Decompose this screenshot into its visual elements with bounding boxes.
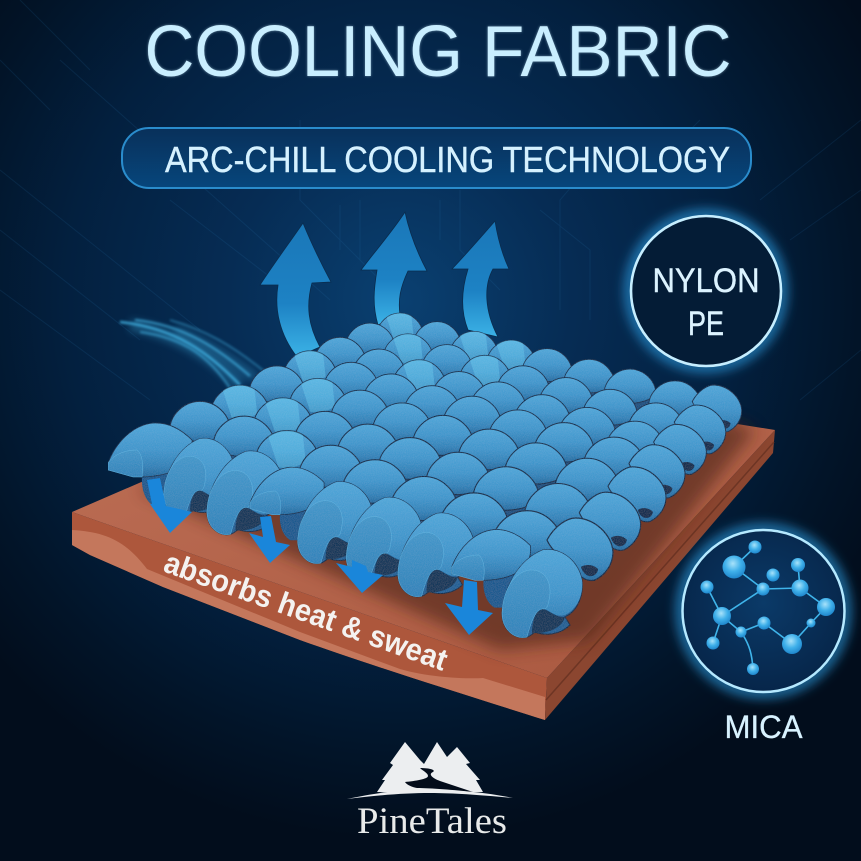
fabric knit <box>108 313 742 638</box>
title: COOLING FABRIC <box>144 12 732 92</box>
row 6 of knit <box>346 323 726 454</box>
copper base layer <box>72 370 775 720</box>
row 2 of knit <box>211 385 641 550</box>
logo mark: pines <box>347 742 513 799</box>
row 4 of knit <box>284 351 685 498</box>
heat arrows rising <box>260 212 509 357</box>
logo: PineTales <box>357 801 507 842</box>
wind wisps <box>120 320 265 388</box>
row 3 of knit <box>249 366 666 522</box>
subtitle pill <box>122 128 751 188</box>
logo <box>347 742 513 842</box>
badge: nylon and PE: NYLON <box>652 262 760 300</box>
front row of curled fibres <box>108 423 582 638</box>
mica label: MICA <box>724 709 803 745</box>
row 1 of knit <box>170 401 613 581</box>
badge: nylon and PE: PE <box>688 305 724 343</box>
downward arrows into base <box>147 478 493 635</box>
subtitle pill: ARC-CHILL COOLING TECHNOLOGY <box>165 139 730 180</box>
row 5 of knit <box>314 337 706 474</box>
badge: nylon and PE <box>630 215 782 367</box>
back row of knit <box>377 313 742 432</box>
label on base: absorbs heat & sweat <box>160 545 452 678</box>
badge: mica molecule <box>682 529 846 693</box>
